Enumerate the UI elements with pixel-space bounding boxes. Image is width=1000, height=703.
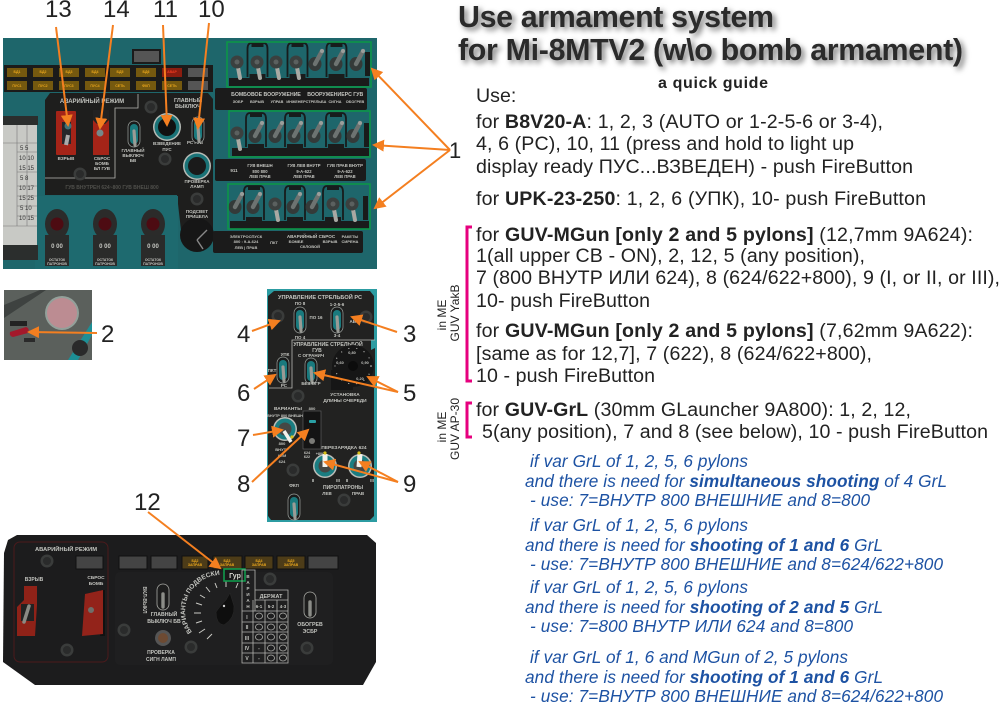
ammo counters box: ОСТАТОК (49, 258, 66, 262)
burst length dial: 0,80 (348, 351, 356, 355)
circuit breaker label plate 2: ЛЕВ ПРАВ (293, 174, 315, 179)
load variant table: И (246, 592, 250, 597)
panel: pylon selection console: АВАРИЙНЫЙ РЕЖИМ (35, 545, 97, 553)
red guard right (82, 575, 105, 636)
pyro selectors 9: II (346, 478, 348, 483)
load variant table (242, 570, 288, 663)
circuit breaker label plate 1 (215, 88, 367, 110)
side label: GUV YakB: in ME (435, 300, 449, 330)
circuit breaker label plate 1: СТРЕЛЬБА (306, 100, 327, 104)
selector 7: 624 (279, 459, 286, 464)
indicator lamp rows: БД2 (40, 70, 47, 74)
pyro selectors 9: ЛЕВ (322, 491, 332, 496)
selector 7: ВНУТР 800 ВНЕШН (267, 414, 303, 418)
white reference table: 5 8 (20, 176, 29, 182)
switch 5: БЕЗ ОГР (301, 381, 321, 386)
circuit breaker label plate 2: ГУВ ЛЕВ ВНУТР (287, 163, 321, 168)
panel: rocket and gun firing control: УПРАВЛЕНИЕ СТРЕЛЬБОЙ (293, 340, 363, 348)
switch 5: С ОГРАНИЧ (298, 353, 324, 358)
white reference table: 10 17 (19, 186, 35, 192)
black emergency mode plate: БЛ ГУВ (94, 166, 111, 171)
circuit breaker label plate 3: 800 : 9-А-624 (234, 239, 259, 244)
white reference table: 15 15 (19, 166, 35, 172)
white reference table: 5 10 (20, 206, 32, 212)
text block: general instructions (476, 85, 926, 210)
text block: shooting of 1 and 6 (525, 515, 943, 574)
circuit breaker label plate 3: СКЛОВОЙ (300, 244, 320, 249)
circuit breaker label plate 1: ОБОГРЕВ (346, 100, 365, 104)
selector 7: ИЛИ (278, 453, 286, 458)
text block: GUV machine guns: 10- push FireButton (476, 290, 650, 312)
circuit breaker label plate 1: ВЗРЫВ (250, 100, 264, 104)
indicator lamp rows: БД1 (14, 70, 21, 74)
switch 3: АВТ (349, 319, 359, 324)
slide switch 8: 800 (309, 406, 316, 411)
black emergency mode plate: ПРИЦЕЛА (186, 214, 209, 219)
circuit breaker label plate 1: ИНЖЕНЕР (286, 100, 306, 104)
text block: GUV grenade launcher: 5(any position), 7 and 8 (see below), 10 - push FireButton (482, 421, 988, 443)
circuit breaker label plate 3: ЭЛЕКТРОСПУСК (230, 234, 263, 239)
load variant table: V (245, 656, 249, 662)
indicator lamp rows: БД6 (143, 70, 150, 74)
switch 3: 3-4 (334, 333, 341, 338)
side label: GUV AP-30: in ME (435, 412, 449, 442)
subtitle: a quick guide (658, 75, 768, 92)
circuit breaker label plate 2 (215, 159, 366, 181)
highlighted status text: Гур (229, 573, 241, 580)
load variant table: 4-3 (280, 604, 287, 609)
text block: mixed GrL and MGun: if var GrL of 1, 6 and MGun of 2, 5 pylons (530, 647, 848, 667)
selector 7: ВНУТР (275, 447, 289, 452)
text block: GUV machine guns: 7 (800 ВНУТР ИЛИ 624), 8 (624/622+800), 9 (I, or II, or III), (476, 267, 1000, 289)
red guard 13 (56, 111, 76, 155)
red guard right: БОМБ (89, 581, 104, 587)
circuit breaker label plate 1: РС ГУВ (345, 92, 363, 98)
text block: GUV machine guns (476, 224, 1000, 387)
indicator lamp rows: БД3 (66, 70, 73, 74)
ammo counters box: ОСТАТОК (145, 258, 162, 262)
indicator lamp rows: ПУС4 (90, 84, 100, 88)
panel: overhead armament console (3, 38, 377, 269)
panel: fire button cover photo (4, 290, 92, 360)
callout numbers: 2 (101, 321, 114, 348)
indicator lamp rows: СЕТЬ (115, 84, 125, 88)
black emergency mode plate: ГЛАВНЫЙ (122, 146, 144, 153)
heating switch (297, 592, 323, 635)
text block: shooting of 1 and 6: and there is need for shooting of 1 and 6 GrL (525, 535, 883, 555)
load variant table: 6-1 (256, 604, 263, 609)
circuit breaker label plate 3: ВЗРЫВ (323, 239, 338, 244)
red guard 14 (93, 110, 109, 155)
switch 5 (298, 353, 324, 386)
switch 4: ПО 4 (295, 335, 306, 340)
circuit breaker label plate 3: БОМБЕ (289, 239, 304, 244)
annunciator row (76, 556, 338, 569)
text block: general instructions: Use: (476, 85, 516, 107)
circuit breaker label plate 1: СИГНА (328, 100, 342, 104)
circuit breaker label plate 2: 9-А-622 (337, 169, 353, 174)
white reference table (3, 116, 38, 260)
black emergency mode plate: ЛАМП (190, 184, 204, 189)
switch 3 (330, 302, 359, 338)
panel: pylon selection console (3, 535, 376, 685)
ammo counters box: 0 00 (147, 244, 159, 250)
circuit breaker label plate 3: СИРЕНА (342, 239, 359, 244)
annunciator row: ЗАПРАВ (284, 563, 299, 567)
annunciator row: БД5 (288, 559, 295, 563)
black emergency mode plate: ВЗРЫВ (58, 156, 75, 161)
side label: GUV YakB: GUV YakB (448, 285, 462, 341)
callout numbers: 9 (403, 471, 416, 498)
green highlight frames (227, 42, 371, 229)
white reference table: 10 15 (19, 216, 35, 222)
arrows (29, 23, 450, 568)
callout numbers: 8 (237, 471, 250, 498)
pylon variant dial (180, 570, 238, 640)
panel: rocket and gun firing control: ДЛИНЫ ОЧЕРЕДИ (323, 398, 367, 404)
text block: shooting of 2 and 5 (525, 577, 883, 636)
lamp test: ПРОВЕРКА (147, 650, 175, 656)
switch 4 (294, 301, 323, 340)
load variant table: Р (246, 586, 250, 591)
switch 4: ПО 16 (310, 315, 323, 320)
text block: general instructions: display ready ПУС...ВЗВЕДЕН) - push FireButton (476, 156, 913, 178)
ammo counters box: ПАТРОНОВ (95, 262, 115, 266)
annunciator row: БД2 (192, 559, 199, 563)
pylon variant dial: ВАРИАНТЫ ПОДВЕСКИ (180, 570, 220, 634)
title: Use armament system (458, 0, 774, 34)
selector 7: ВАРИАНТЫ (274, 406, 302, 412)
switch 6 (268, 352, 290, 388)
bracket: GUV YakB (467, 227, 472, 381)
load variant table: III (245, 636, 250, 642)
title: for Mi-8MTV2 (w\o bomb armament) (458, 33, 963, 67)
slide switch 8: 622 (304, 455, 310, 459)
text block: shooting of 2 and 5: and there is need for shooting of 2 and 5 GrL (525, 597, 883, 617)
annunciator row: ЗАПРАВ (220, 563, 235, 567)
text block: shooting of 1 and 6: if var GrL of 1, 2, 5, 6 pylons (530, 515, 748, 535)
button 11 (153, 113, 181, 141)
text block: GUV machine guns: 10 - push FireButton (476, 365, 655, 387)
text block: shooting of 2 and 5: - use: 7=800 ВНУТР ИЛИ 624 and 8=800 (530, 616, 853, 636)
text block: mixed GrL and MGun (525, 647, 943, 703)
callout numbers: 6 (237, 380, 250, 407)
FKP switch: ФКП (289, 483, 299, 488)
bracket: GUV AP-30 (467, 403, 472, 437)
selector 7: 800 (279, 441, 286, 446)
red guard right: СБРОС (87, 575, 105, 581)
pyro selectors 9: ПРАВ (352, 491, 365, 496)
black emergency mode plate: БВ (130, 158, 137, 163)
main switch: ВКЛ-ВЫКЛ (141, 587, 147, 614)
circuit breaker label plate 3: АВАРИЙНЫЙ СБРОС (287, 232, 336, 239)
load variant table: ДЕРЖАТ (260, 594, 283, 600)
load variant table: Н (246, 604, 250, 609)
callout numbers: 7 (237, 425, 250, 452)
load variant table: II (246, 625, 249, 631)
lamp test (146, 630, 176, 663)
switch 4: ПО 8 (295, 301, 306, 306)
round selector knob (180, 218, 214, 252)
highlighted status text (224, 569, 245, 581)
load variant table: В (246, 574, 250, 579)
text block: mixed GrL and MGun: and there is need for shooting of 1 and 6 GrL (525, 667, 883, 687)
slide switch 8: +800 (316, 452, 324, 456)
panel: rocket and gun firing control: УСТАНОВКА (330, 392, 360, 398)
indicator lamp rows: СЕТЬ (167, 84, 177, 88)
callout numbers (45, 0, 461, 516)
ammo counters box: 0 00 (99, 244, 111, 250)
circuit breaker label plate 2: 9-А-622 (296, 169, 312, 174)
black emergency mode plate: ПОДСВЕТ (186, 209, 208, 214)
white reference table: 15 25 (19, 196, 35, 202)
side label: GUV YakB (435, 285, 462, 341)
pyro selectors 9: ПИРОПАТРОНЫ (323, 485, 363, 491)
ammo counters box (35, 196, 178, 269)
indicator lamp rows: БД4 (92, 70, 99, 74)
annunciator row: ЗАПРАВ (252, 563, 267, 567)
indicator lamp rows: АВАР (167, 70, 178, 74)
text block: GUV grenade launcher: for GUV-GrL (30mm GLauncher 9A800): 1, 2, 12, (476, 399, 911, 421)
red guard left (17, 577, 44, 636)
black emergency mode plate: БОМБ (95, 161, 110, 166)
switch 3: 1-2-5-6 (330, 302, 345, 307)
callout numbers: 12 (134, 489, 161, 516)
FKP switch (288, 483, 300, 520)
white reference table: 5 5 (20, 146, 29, 152)
black emergency mode plate: ГУВ ВНУТРЕН 624~800 ГУВ ВНЕШ 800 (65, 185, 159, 191)
circuit breaker label plate 2: ЛЕВ ПРАВ (249, 174, 271, 179)
text block: simultaneous shooting: if var GrL of 1, 2, 5, 6 pylons (530, 451, 748, 471)
switch 6: РС (281, 383, 288, 388)
slide switch 8: 624 (304, 451, 311, 455)
circuit breaker label plate 2: ГУВ ПРАВ ВНУТР (327, 163, 363, 168)
annunciator row: ЗАПРАВ (188, 563, 203, 567)
text block: general instructions: for UPK-23-250: 1, 2, 6 (УПК), 10- push FireButton (476, 188, 926, 210)
circuit breaker label plate 2: ЛЕВ ПРАВ (334, 174, 356, 179)
circuit breaker label plate 2: ГУВ ВНЕШН (247, 163, 273, 168)
heating switch: ОБОГРЕВ (297, 622, 323, 628)
callout numbers: 1 (449, 138, 461, 163)
side label: GUV AP-30: GUV AP-30 (448, 398, 462, 460)
selector 7 (267, 406, 303, 464)
panel: rocket and gun firing control: УПРАВЛЕНИЕ СТРЕЛЬБОЙ РС (278, 293, 362, 301)
load variant table: - (258, 646, 260, 652)
text block: simultaneous shooting (525, 451, 947, 510)
switch 6: УПК (281, 352, 290, 357)
circuit breaker label plate 3: ПКТ (270, 240, 278, 245)
black emergency mode plate: ПУС (162, 147, 172, 152)
annunciator row: БД3 (224, 559, 231, 563)
pyro selectors 9: ПЕРЕЗАРЯДКА 624 (321, 445, 367, 451)
circuit breaker label plate 3 (213, 231, 363, 253)
pyro selectors 9 (312, 445, 374, 496)
circuit breaker label plate 2: 800 800 (252, 169, 268, 174)
text block: simultaneous shooting: - use: 7=ВНУТР 800 ВНЕШНИЕ and 8=800 (530, 490, 870, 510)
circuit breaker label plate 3: ЛЕВ | ПРАВ (235, 245, 257, 250)
title (458, 0, 963, 67)
switch 6: ПКТ (268, 368, 277, 373)
indicator lamp rows (4, 50, 213, 92)
text block: shooting of 1 and 6: - use: 7=ВНУТР 800 ВНЕШНИЕ and 8=624/622+800 (530, 554, 943, 574)
burst length dial (331, 345, 374, 390)
text block: GUV machine guns: for GUV-MGun [only 2 and 5 pylons] (7,62mm 9A622): (476, 320, 973, 342)
text block: general instructions: 4, 6 (PC), 10, 11 (press and hold to light up (476, 133, 854, 155)
circuit breaker label plate 1: ВООРУЖЕНИЕ (307, 92, 345, 98)
panel: rocket and gun firing control (267, 289, 377, 522)
black emergency mode plate: ВЫКЛЮЧ (175, 104, 201, 110)
pyro selectors 9: III (336, 478, 340, 483)
indicator lamp rows: ФКП (142, 84, 150, 88)
circuit breaker row 2 (230, 113, 369, 156)
circuit breaker row 1 (229, 43, 370, 86)
ammo counters box: ПАТРОНОВ (47, 262, 67, 266)
circuit breaker label plate 1: БОМБОВОЕ ВООРУЖЕНИЕ (231, 92, 301, 98)
main switch (141, 584, 181, 625)
main switch: ВЫКЛЮЧ БВ (147, 619, 181, 625)
ammo counters box: 0 00 (51, 244, 63, 250)
burst length dial: 0,90 (361, 361, 369, 365)
slide switch 8 (303, 406, 324, 459)
black emergency mode plate: ГЛАВНЫЙ (174, 96, 202, 104)
text block: GUV machine guns: for GUV-MGun [only 2 and 5 pylons] (12,7mm 9A624): (476, 224, 973, 246)
text block: general instructions: for B8V20-A: 1, 2, 3 (AUTO or 1-2-5-6 or 3-4), (476, 111, 883, 133)
black emergency mode plate: АВАРИЙНЫЙ РЕЖИМ (60, 97, 124, 105)
text block: GUV grenade launcher (476, 399, 988, 443)
callout numbers: 5 (403, 380, 416, 407)
indicator lamp rows: ПУС1 (12, 84, 22, 88)
text block: simultaneous shooting: and there is need for simultaneous shooting of 4 GrL (525, 471, 947, 491)
load variant table: А (246, 580, 250, 585)
text block: shooting of 2 and 5: if var GrL of 1, 2, 5, 6 pylons (530, 577, 748, 597)
black emergency mode plate: ВЫКЛЮЧ (122, 153, 144, 158)
lamp test: СИГН ЛАМП (146, 657, 176, 663)
text block: GUV machine guns: [same as for 12,7], 7 (622), 8 (624/622+800), (476, 343, 872, 365)
ammo counters box: ПАТРОНОВ (143, 262, 163, 266)
burst length dial: 0,60 (336, 361, 344, 365)
ammo counters box: ОСТАТОК (97, 258, 114, 262)
panel: rocket and gun firing control: ГУВ (312, 348, 322, 354)
load variant table: 5-2 (268, 604, 275, 609)
black emergency mode plate: ВЗВЕДЕНИЕ (153, 141, 181, 146)
indicator lamp rows: ПУС3 (64, 84, 74, 88)
load variant table: IV (245, 646, 250, 652)
circuit breaker label plate 1: ЗОБР (233, 100, 244, 104)
annunciator row: БД4 (256, 559, 263, 563)
black emergency mode plate: ПРОВЕРКА (185, 179, 210, 184)
side label: GUV AP-30 (435, 398, 462, 460)
burst length dial: 0,20 (356, 377, 364, 381)
main switch: ГЛАВНЫЙ (151, 610, 178, 618)
black emergency mode plate: СБРОС (94, 156, 111, 161)
load variant table: - (258, 656, 260, 662)
text block: GUV machine guns: 1(all upper CB - ON), 2, 12, 5 (any position), (476, 245, 865, 267)
black emergency mode plate (45, 93, 213, 239)
indicator lamp rows: ПУС2 (38, 84, 48, 88)
load variant table: А (246, 598, 250, 603)
pyro selectors 9: II (312, 478, 314, 483)
red guard left: ВЗРЫВ (25, 577, 44, 583)
indicator lamp rows: БД5 (117, 70, 124, 74)
circuit breaker label plate 2: 911 (230, 168, 238, 173)
callout numbers: 3 (403, 321, 416, 348)
circuit breaker row 3 (228, 186, 369, 229)
pyro selectors 9: III (370, 478, 374, 483)
white reference table: 10 10 (19, 156, 35, 162)
callout numbers: 4 (237, 321, 250, 348)
load variant table: I (246, 615, 248, 621)
black emergency mode plate: РС ГУВ (187, 140, 204, 145)
heating switch: ЭСБР (303, 629, 318, 635)
circuit breaker label plate 3: РАКЕТЫ (342, 234, 358, 239)
circuit breaker label plate 1: УПРАВ (271, 100, 284, 104)
lamp test button (183, 152, 211, 180)
